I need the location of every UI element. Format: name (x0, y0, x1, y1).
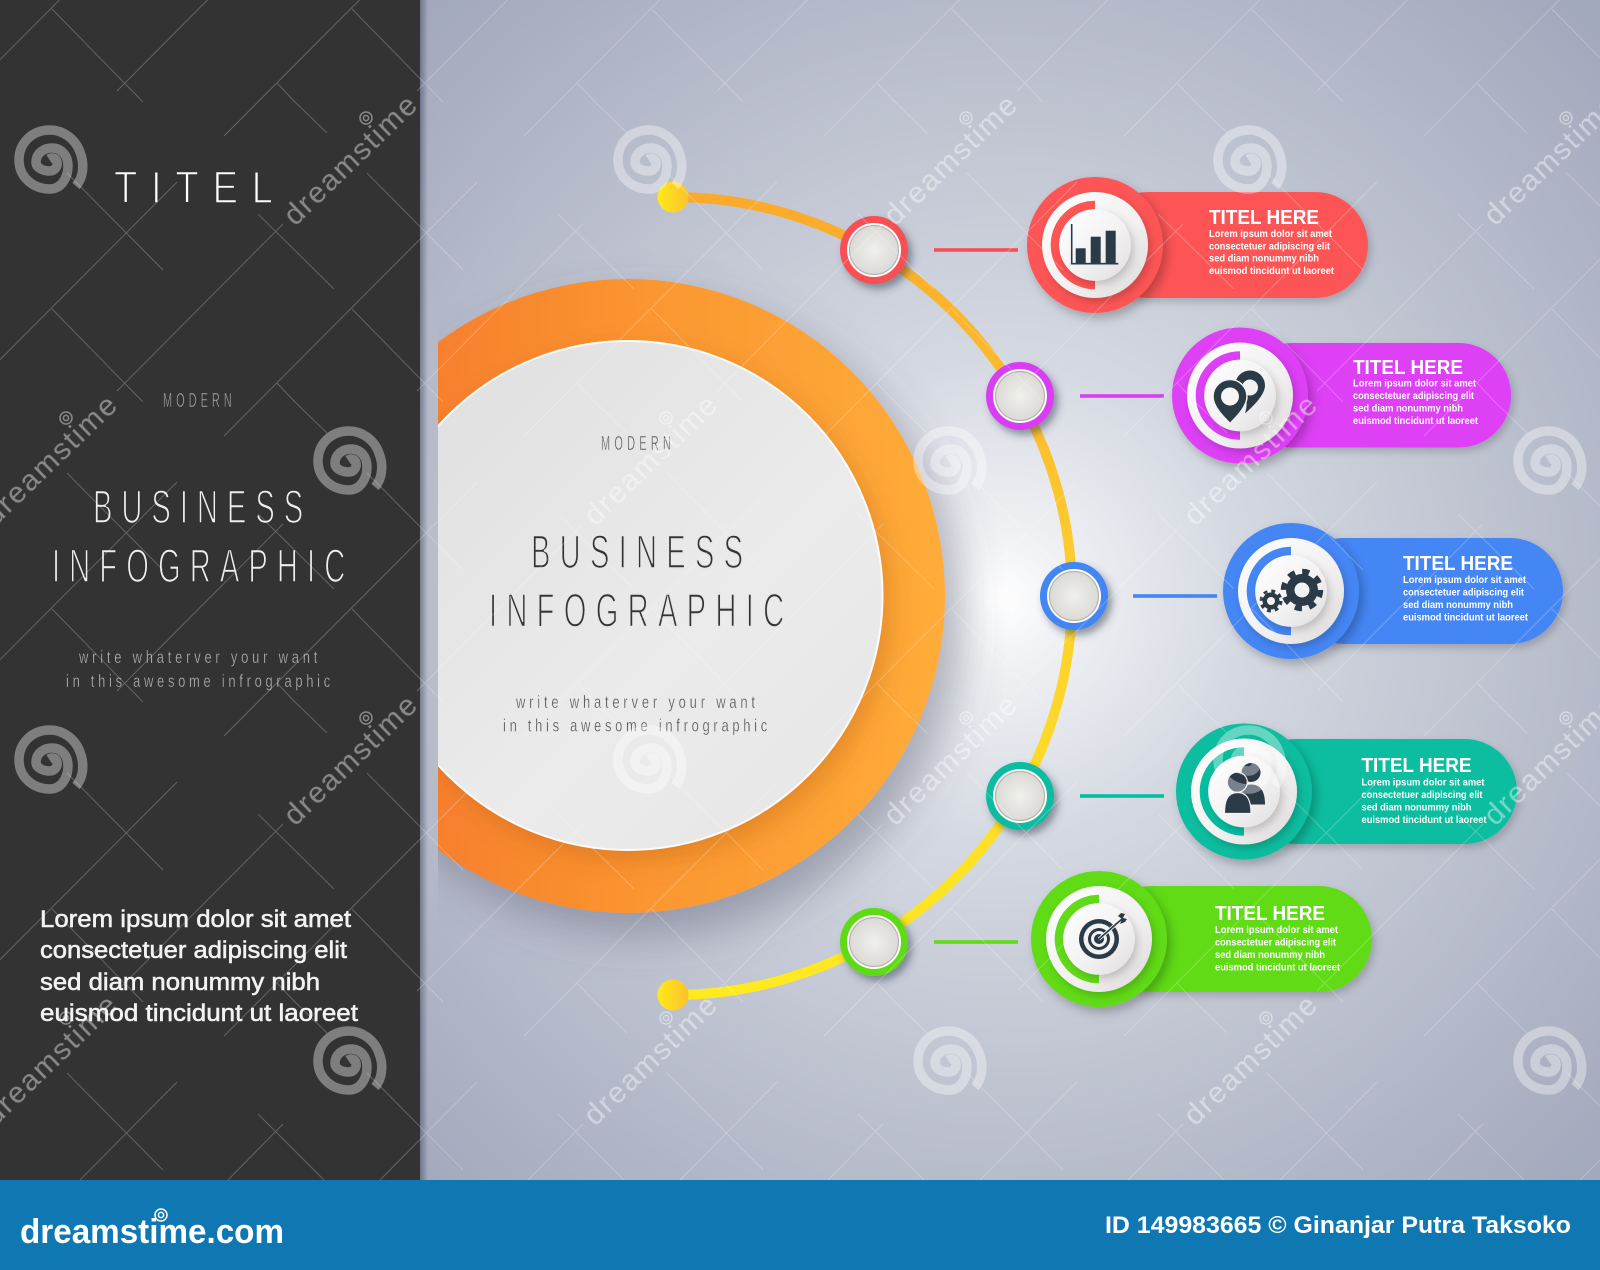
card text: sed diam nonummy nibh (1209, 254, 1319, 264)
card: blue (1223, 523, 1563, 659)
node: teal (986, 762, 1054, 830)
card text: Lorem ipsum dolor sit amet (1362, 778, 1485, 789)
card text: Lorem ipsum dolor sit amet (1403, 575, 1527, 586)
card text: euismod tincidunt ut laoreet (1209, 266, 1335, 277)
sidebar body text: sed diam nonummy nibh (40, 969, 320, 996)
card: purple (1172, 328, 1511, 464)
connector: purple (1080, 394, 1164, 398)
icon: target (1079, 913, 1127, 959)
sidebar subtitle: write whaterver your want (78, 648, 318, 668)
card text: consectetuer adipiscing elit (1403, 588, 1525, 598)
central title: INFOGRAPHIC (489, 586, 784, 637)
card text: Lorem ipsum dolor sit amet (1215, 925, 1339, 936)
card text (1403, 553, 1529, 624)
sidebar kicker: MODERN (163, 390, 232, 412)
node: blue (1040, 562, 1108, 630)
sidebar body text: euismod tincidunt ut laoreet (40, 1000, 358, 1027)
card: green (1031, 871, 1372, 1007)
card text: consectetuer adipiscing elit (1215, 938, 1337, 948)
panel: dark title sidebar (0, 0, 428, 1180)
sidebar title: INFOGRAPHIC (52, 541, 345, 593)
card text (1353, 357, 1479, 427)
timeline arc (658, 182, 1072, 1010)
connector: teal (1080, 794, 1164, 798)
card: teal (1176, 724, 1517, 860)
sidebar body text (40, 906, 358, 1027)
connector: red (934, 248, 1018, 252)
card text: TITEL HERE (1362, 755, 1472, 777)
card text (1209, 207, 1335, 277)
card text: Lorem ipsum dolor sit amet (1353, 379, 1477, 390)
infographic canvas: dreamstime (277, 89, 424, 232)
sidebar subtitle: in this awesome infrographic (66, 672, 330, 692)
card text: sed diam nonummy nibh (1362, 802, 1472, 814)
sidebar subtitle (66, 648, 330, 692)
sidebar heading: TITEL (114, 162, 273, 213)
card text: euismod tincidunt ut laoreet (1353, 416, 1479, 427)
card text: consectetuer adipiscing elit (1353, 391, 1475, 402)
arc bottom end dot (658, 980, 688, 1010)
card text: TITEL HERE (1353, 357, 1463, 379)
infographic canvas: dreamstime (1177, 989, 1324, 1132)
card text: TITEL HERE (1403, 553, 1513, 575)
central title: BUSINESS (531, 527, 743, 579)
infographic canvas: dreamstime (877, 689, 1024, 832)
central subtitle (503, 693, 767, 736)
node: purple (986, 362, 1054, 430)
icon: bar chart (1072, 224, 1118, 264)
card text: consectetuer adipiscing elit (1209, 242, 1331, 252)
card text (1362, 755, 1487, 826)
sidebar body text: consectetuer adipiscing elit (40, 937, 347, 964)
card text: TITEL HERE (1215, 903, 1325, 925)
infographic canvas: dreamstime (1177, 389, 1324, 532)
card text: euismod tincidunt ut laoreet (1215, 962, 1341, 974)
arc top end dot (658, 182, 688, 212)
card text: consectetuer adipiscing elit (1362, 790, 1483, 801)
sidebar title: BUSINESS (93, 482, 303, 534)
central subtitle: in this awesome infrographic (503, 717, 767, 736)
central kicker: MODERN (601, 433, 671, 455)
card text: sed diam nonummy nibh (1403, 600, 1513, 611)
central circle (311, 279, 945, 913)
white plate (374, 341, 882, 850)
infographic canvas: dreamstime (877, 89, 1024, 232)
footer logo: dreamstime.com (20, 1213, 284, 1251)
infographic canvas: dreamstime (277, 689, 424, 832)
sidebar body text: Lorem ipsum dolor sit amet (40, 906, 351, 933)
infographic canvas: dreamstime (577, 389, 724, 532)
card text (1215, 903, 1341, 974)
node: green (840, 908, 908, 976)
card text: euismod tincidunt ut laoreet (1362, 815, 1487, 826)
icon: people (1224, 763, 1265, 814)
infographic canvas: dreamstime (577, 989, 724, 1132)
sidebar title (52, 482, 345, 593)
central subtitle: write whaterver your want (515, 693, 756, 713)
card text: TITEL HERE (1209, 207, 1319, 229)
card text: Lorem ipsum dolor sit amet (1209, 229, 1333, 240)
card text: sed diam nonummy nibh (1353, 404, 1463, 414)
connector: green (934, 940, 1018, 944)
connector: blue (1133, 594, 1217, 598)
card text: sed diam nonummy nibh (1215, 950, 1325, 961)
icon: gears (1262, 572, 1320, 610)
icon: location pins (1213, 370, 1265, 424)
central title (492, 536, 782, 626)
card: red (1027, 177, 1368, 313)
card text: euismod tincidunt ut laoreet (1403, 612, 1529, 624)
node: red (840, 216, 908, 284)
orange ring (311, 279, 945, 913)
footer bar (0, 1180, 1600, 1270)
footer credit: ID 149983665 © Ginanjar Putra Taksoko (1105, 1212, 1571, 1239)
